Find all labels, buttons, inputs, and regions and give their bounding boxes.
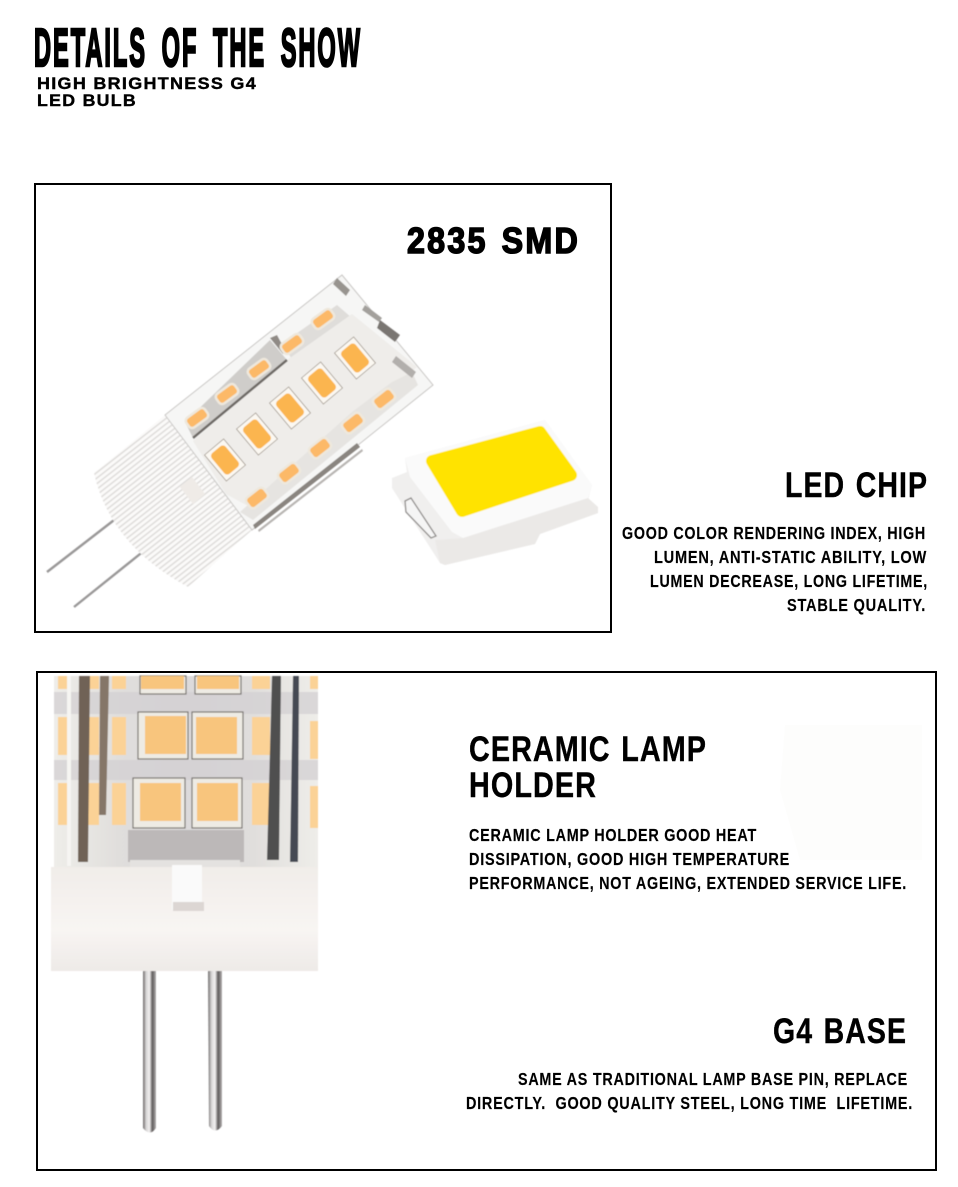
icon: upright G4 bulb [51,676,318,1132]
subtitle: HIGH BRIGHTNESS G4 [37,75,257,93]
icon: 2835 SMD chip [392,420,598,565]
text: DETAILS OF THE SHOW [34,18,362,78]
CERAMIC LAMP HOLDER text block: DISSIPATION, GOOD HIGH TEMPERATURE [469,849,790,869]
front chips [133,676,243,828]
icon: angled G4 bulb [47,275,433,607]
metal streaks [67,676,299,866]
CERAMIC LAMP HOLDER text block: CERAMIC LAMP [469,729,707,769]
subtitle [37,75,257,110]
panel: ceramic holder and G4 base [37,672,936,1170]
LED CHIP text block [622,465,928,615]
lower band [240,372,418,520]
panel: 2835 SMD [35,184,611,632]
central band [193,314,417,505]
G4 BASE text block: G4 BASE [773,1011,907,1051]
side chips [58,676,318,828]
bulb pins [143,970,222,1132]
LED CHIP text block: STABLE QUALITY. [787,595,926,615]
heading: 2835 SMD: 2835 SMD [407,220,580,261]
CERAMIC LAMP HOLDER text block: CERAMIC LAMP HOLDER GOOD HEAT [469,825,757,845]
faint ghost background [780,725,922,860]
upper and lower rows of chips [184,307,397,510]
G4 BASE text block [466,1011,913,1113]
subtitle: LED BULB [37,92,137,110]
clear silicone body [54,676,318,867]
upper recess [185,340,287,438]
centre row of chips [204,337,376,481]
ceramic base [51,867,318,971]
CERAMIC LAMP HOLDER text block: HOLDER [469,765,597,805]
LED CHIP text block: LED CHIP [785,465,928,505]
CERAMIC LAMP HOLDER text block [469,729,907,893]
